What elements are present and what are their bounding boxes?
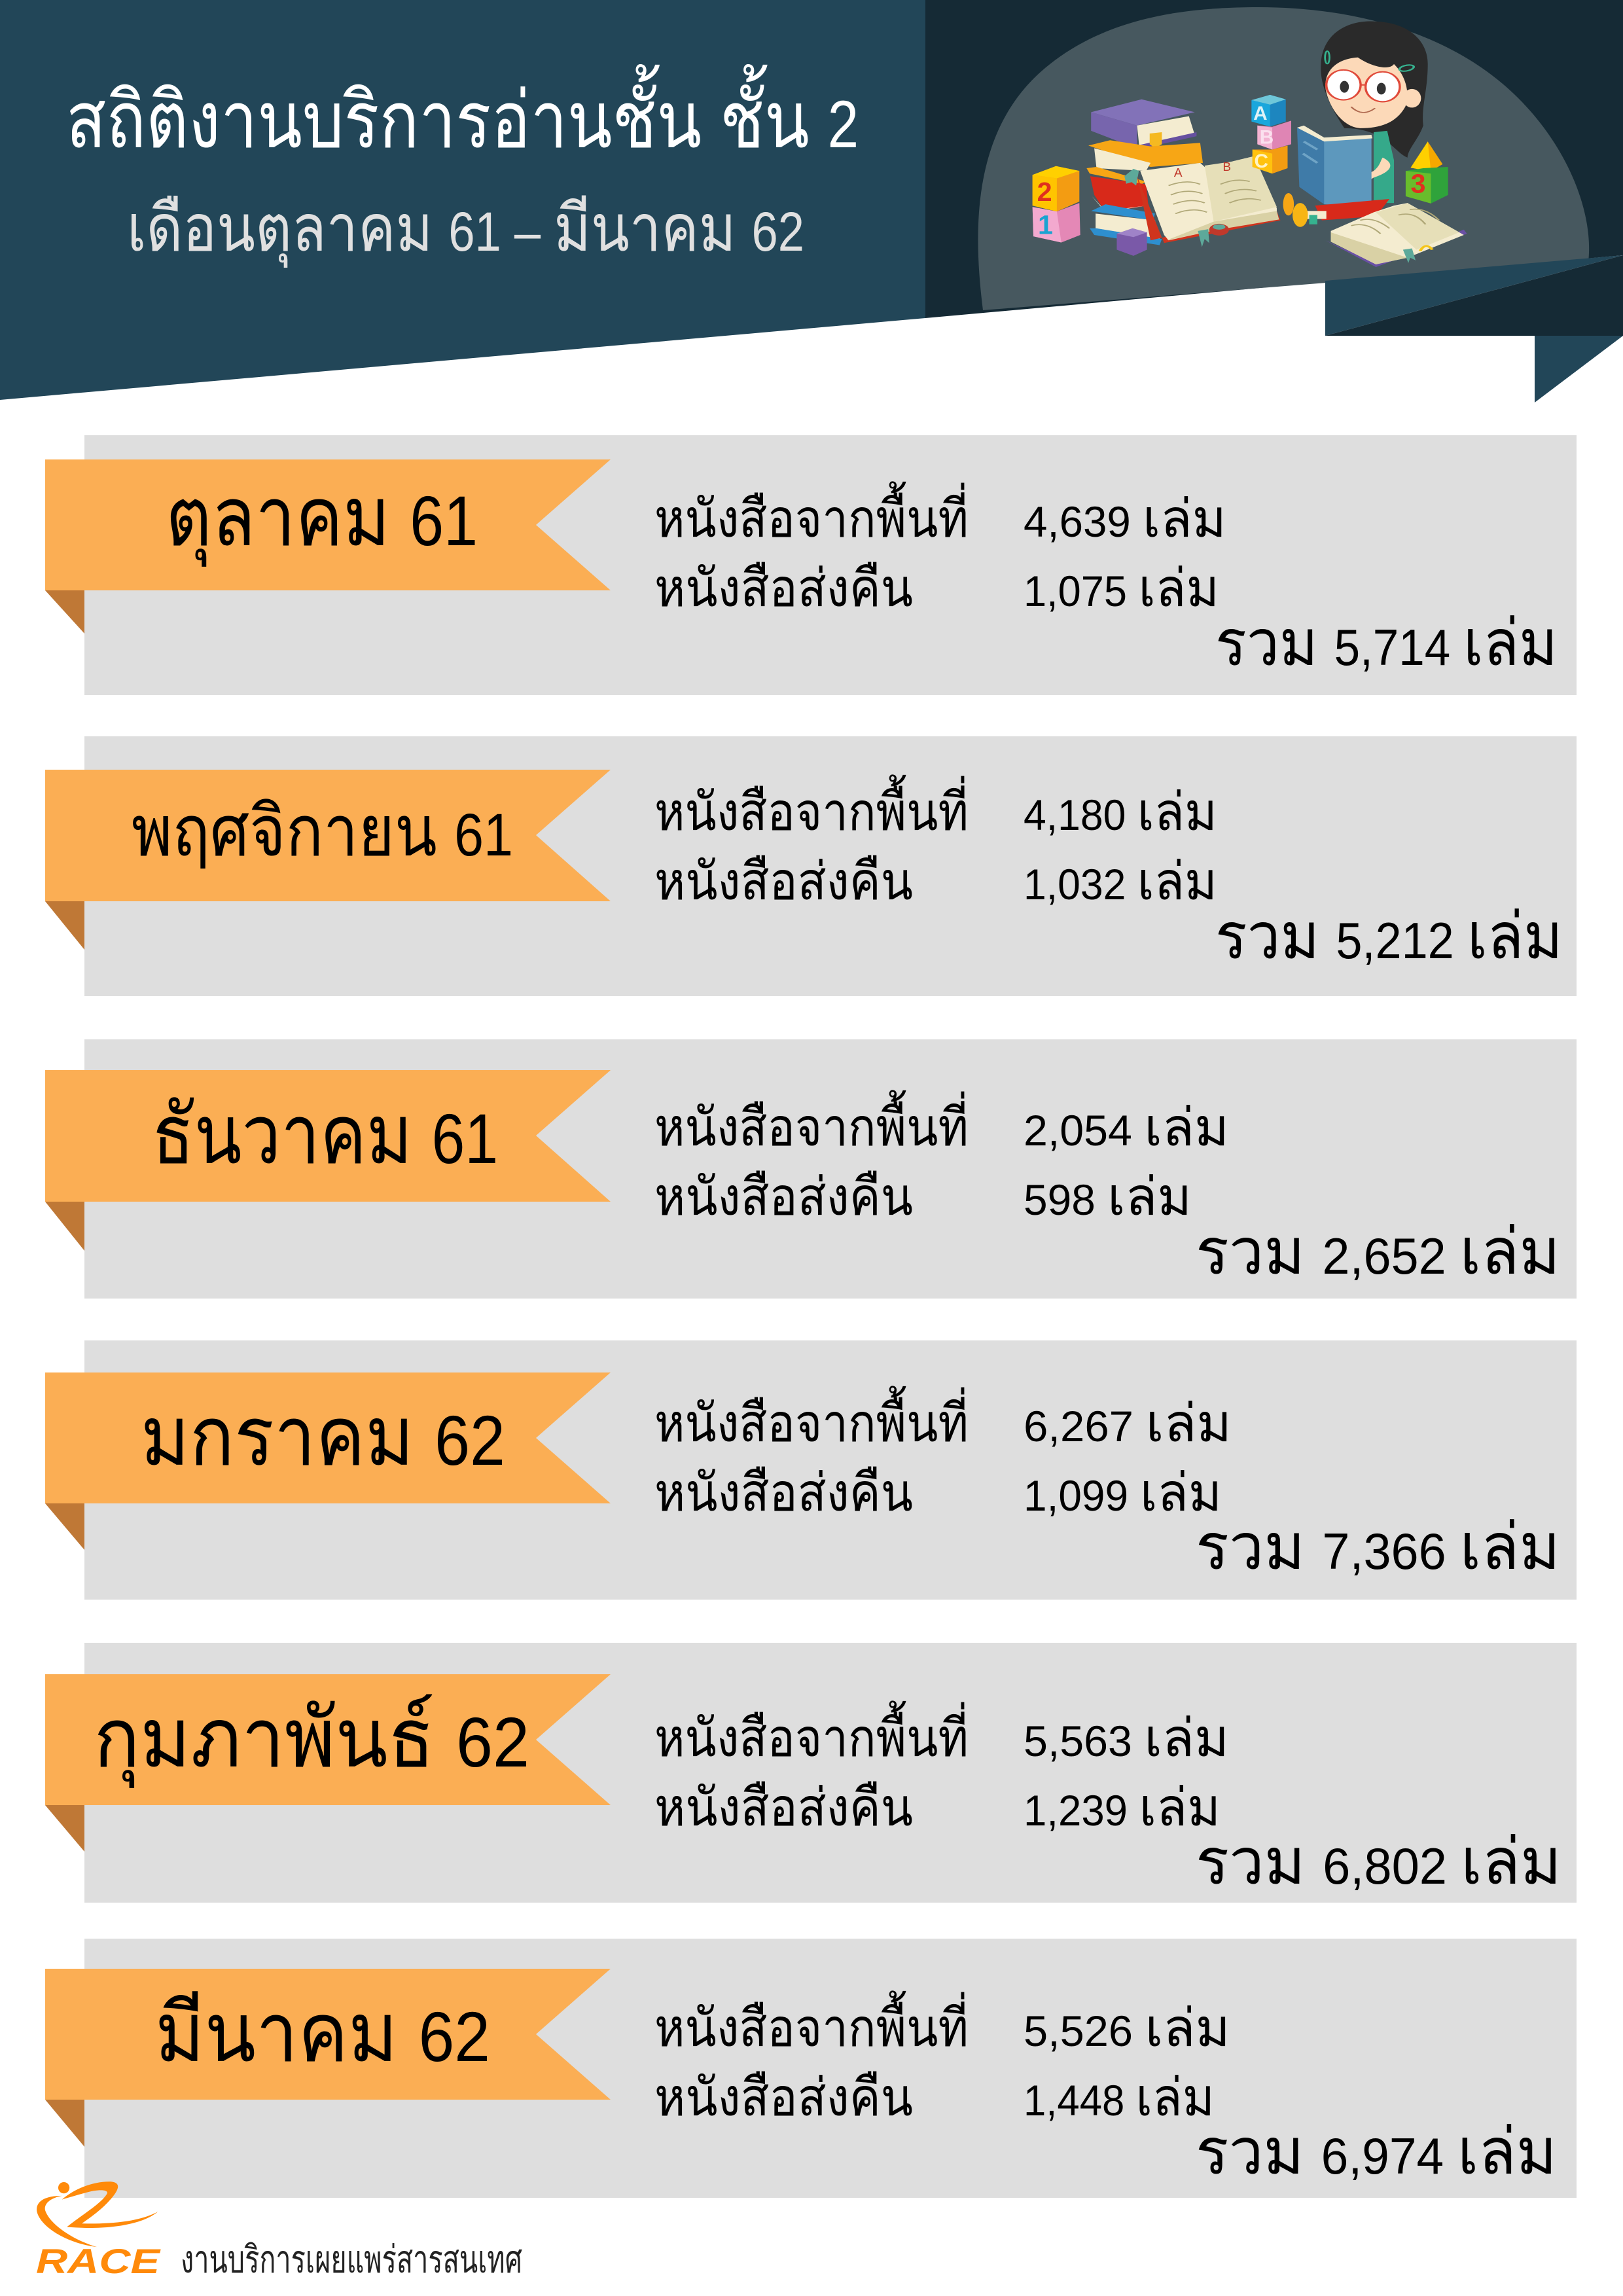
month ribbon: ตุลาคม 61 (166, 471, 478, 567)
figures (654, 1990, 1557, 2187)
legs (1315, 199, 1389, 221)
hair clips (1325, 51, 1330, 64)
arm (1360, 158, 1390, 185)
figures: รวม 2,652 เล่ม (1196, 1215, 1560, 1287)
figures: หนังสือส่งคืน (654, 1778, 913, 1837)
block 2 and 1 (1033, 166, 1080, 242)
figures: 598 เล่ม (1024, 1168, 1192, 1226)
panel: March 62 (45, 1939, 1577, 2198)
month ribbon (45, 770, 611, 950)
panel: October 61 (45, 435, 1577, 695)
illustration: girl reading with books and blocks (1033, 22, 1467, 267)
block 2 and 1: 2 (1037, 177, 1052, 207)
block 3 with cone (1406, 141, 1448, 204)
figures (654, 1090, 1560, 1287)
figures (654, 1700, 1561, 1897)
figures: หนังสือส่งคืน (654, 852, 913, 910)
month ribbon: กุมภาพันธ์ 62 (94, 1692, 529, 1788)
month ribbon (45, 1070, 611, 1251)
figures: รวม 5,714 เล่ม (1215, 607, 1558, 679)
footer: RACE logo (36, 2181, 161, 2281)
month ribbon: พฤศจิกายน 61 (132, 791, 513, 870)
figures (654, 481, 1558, 679)
figures: รวม 6,802 เล่ม (1196, 1825, 1561, 1897)
footer text: งานบริการเผยแพร่สารสนเทศ (181, 2238, 522, 2281)
figures: 1,032 เล่ม (1024, 852, 1217, 910)
book stack (1086, 99, 1203, 256)
subtitle: เดือนตุลาคม 61 – มีนาคม 62 (127, 192, 804, 268)
panel: November 61 (45, 736, 1577, 996)
ABC blocks: C (1255, 151, 1268, 172)
figures (654, 774, 1563, 972)
header banner (0, 0, 1623, 403)
panel: January 62 (45, 1340, 1577, 1600)
ribbon fold (1325, 255, 1623, 336)
figures: 5,563 เล่ม (1024, 1709, 1229, 1767)
figures: 1,075 เล่ม (1024, 559, 1219, 617)
girl (1283, 22, 1428, 227)
dress (1374, 131, 1394, 203)
month ribbon: มกราคม 62 (141, 1390, 505, 1482)
open book: A (1174, 166, 1183, 180)
figures: หนังสือจากพื้นที่ (654, 481, 969, 548)
figures: 1,099 เล่ม (1024, 1463, 1222, 1522)
blue book (1297, 128, 1372, 206)
figures: รวม 5,212 เล่ม (1215, 900, 1563, 972)
figures: 6,267 เล่ม (1024, 1394, 1232, 1452)
dome backdrop (978, 7, 1589, 310)
block 3 with cone: 3 (1411, 169, 1425, 199)
glasses (1327, 70, 1361, 100)
month ribbon (45, 1372, 611, 1550)
month ribbon (45, 1674, 611, 1852)
open book (1137, 156, 1280, 247)
ABC blocks: A (1253, 103, 1268, 124)
figures: หนังสือจากพื้นที่ (654, 1386, 969, 1452)
open book on floor (1325, 203, 1467, 267)
figures: รวม 6,974 เล่ม (1196, 2115, 1557, 2187)
figures: หนังสือจากพื้นที่ (654, 774, 969, 841)
ABC blocks (1251, 95, 1291, 173)
figures: รวม 7,366 เล่ม (1196, 1511, 1560, 1583)
figures: หนังสือจากพื้นที่ (654, 1090, 969, 1157)
figures: หนังสือส่งคืน (654, 1168, 913, 1226)
figures: 4,639 เล่ม (1024, 490, 1226, 548)
month ribbon (45, 459, 611, 634)
logo wordmark: RACE (36, 2242, 161, 2281)
month ribbon (45, 1969, 611, 2147)
panel: February 62 (45, 1643, 1577, 1903)
month ribbon: ธันวาคม 61 (152, 1088, 498, 1181)
ABC blocks: B (1260, 127, 1274, 148)
figures: หนังสือส่งคืน (654, 1463, 913, 1522)
figures: หนังสือส่งคืน (654, 2068, 913, 2126)
face (1325, 58, 1407, 128)
figures: หนังสือจากพื้นที่ (654, 1700, 969, 1767)
figures (654, 1386, 1560, 1583)
logo mark (37, 2181, 158, 2247)
block 2 and 1: 1 (1038, 210, 1053, 240)
figures: 2,054 เล่ม (1024, 1098, 1229, 1157)
panel: December 61 (45, 1039, 1577, 1299)
figures: 4,180 เล่ม (1024, 783, 1217, 841)
title: สถิติงานบริการอ่านชั้น ชั้น 2 (66, 64, 859, 164)
month ribbon: มีนาคม 62 (155, 1986, 490, 2079)
figures: หนังสือส่งคืน (654, 559, 913, 617)
figures: 1,448 เล่ม (1024, 2068, 1215, 2126)
figures: 5,526 เล่ม (1024, 1999, 1230, 2057)
open book: B (1222, 160, 1231, 174)
hair (1321, 22, 1428, 158)
figures: 1,239 เล่ม (1024, 1778, 1221, 1837)
figures: หนังสือจากพื้นที่ (654, 1990, 969, 2057)
